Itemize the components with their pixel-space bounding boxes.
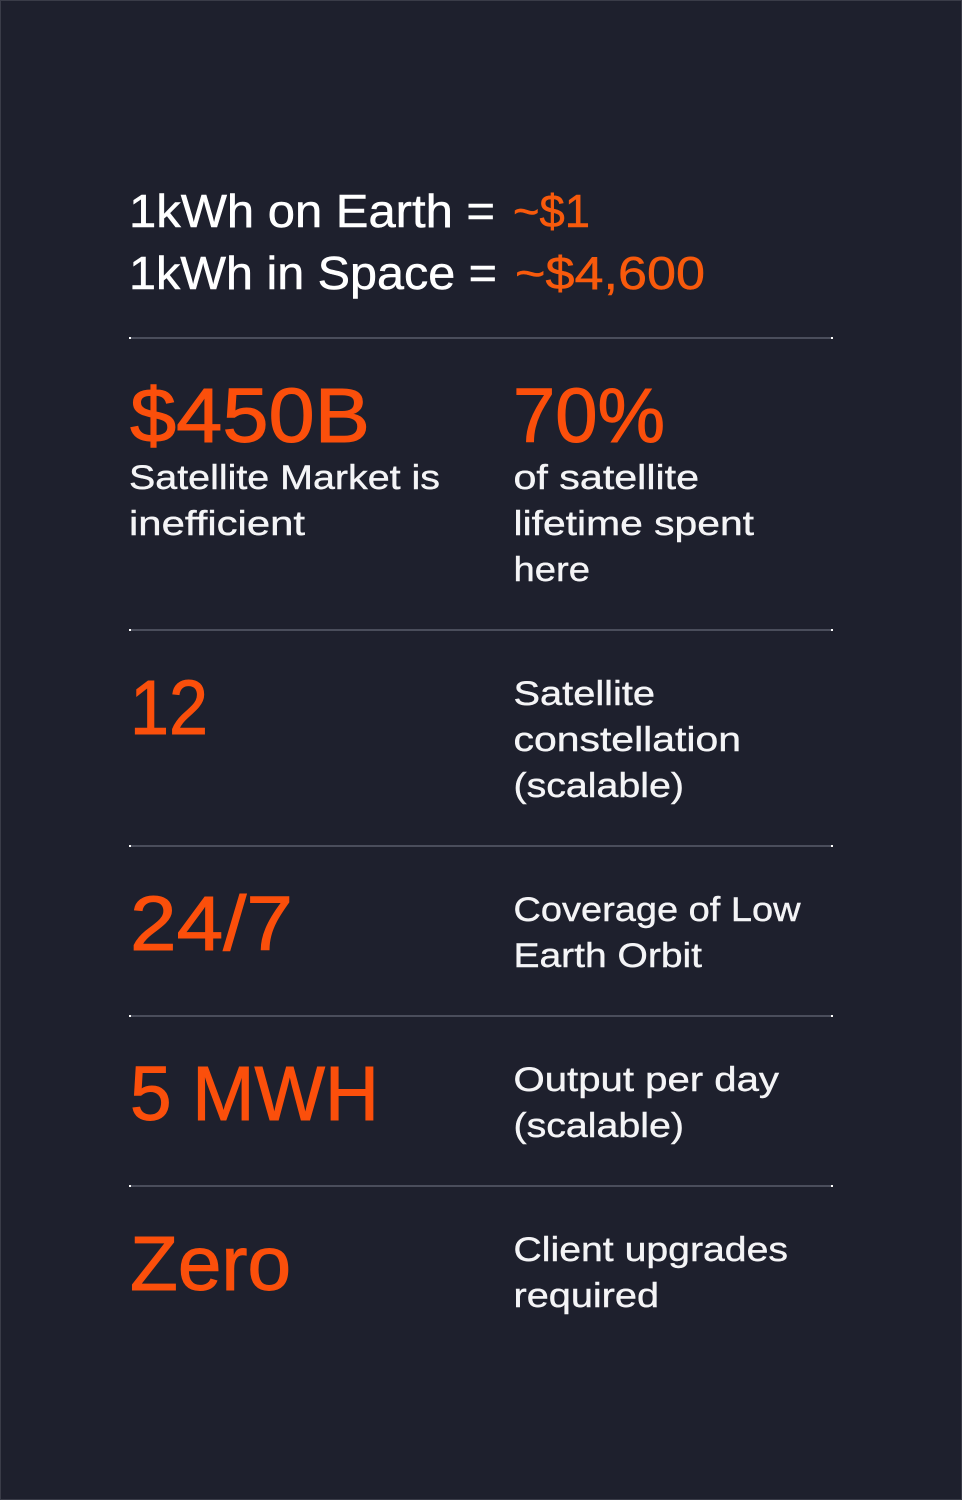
stat row: constellation: constellation [514, 721, 741, 759]
stat row: upgrades [130, 1221, 788, 1315]
stat row: output: Output per day [514, 1061, 779, 1099]
stat row: market and lifetime: Satellite Market is [129, 459, 440, 497]
heading: cost per kWh: ~$4,600 [515, 247, 705, 299]
stat row: upgrades: Zero [130, 1221, 291, 1307]
stat row: output [130, 1051, 779, 1145]
stat row: output: 5 MWH [130, 1051, 379, 1137]
stat row: coverage: Coverage of Low [514, 891, 801, 929]
stat row: constellation: 12 [130, 665, 208, 751]
stat row: constellation [130, 665, 741, 805]
stat row: market and lifetime: here [514, 551, 590, 589]
stat row: market and lifetime: 70% [513, 373, 665, 459]
heading: cost per kWh [129, 185, 705, 299]
stat row: constellation: Satellite [514, 675, 655, 713]
stat row: market and lifetime: inefficient [129, 505, 306, 543]
stat row: output: (scalable) [514, 1107, 684, 1145]
heading: cost per kWh: ~$1 [513, 185, 590, 237]
stat row: market and lifetime: lifetime spent [514, 505, 755, 543]
stat row: coverage [130, 881, 801, 975]
stat row: upgrades: required [514, 1277, 659, 1315]
stat row: market and lifetime [129, 373, 755, 589]
stat row: coverage: 24/7 [130, 881, 293, 967]
heading: cost per kWh: 1kWh on Earth = [129, 185, 495, 237]
stat row: market and lifetime: of satellite [514, 459, 699, 497]
stat row: coverage: Earth Orbit [514, 937, 703, 975]
stat row: upgrades: Client upgrades [514, 1231, 788, 1269]
stat row: market and lifetime: $450B [130, 373, 370, 459]
stat row: constellation: (scalable) [514, 767, 684, 805]
heading: cost per kWh: 1kWh in Space = [129, 247, 497, 299]
